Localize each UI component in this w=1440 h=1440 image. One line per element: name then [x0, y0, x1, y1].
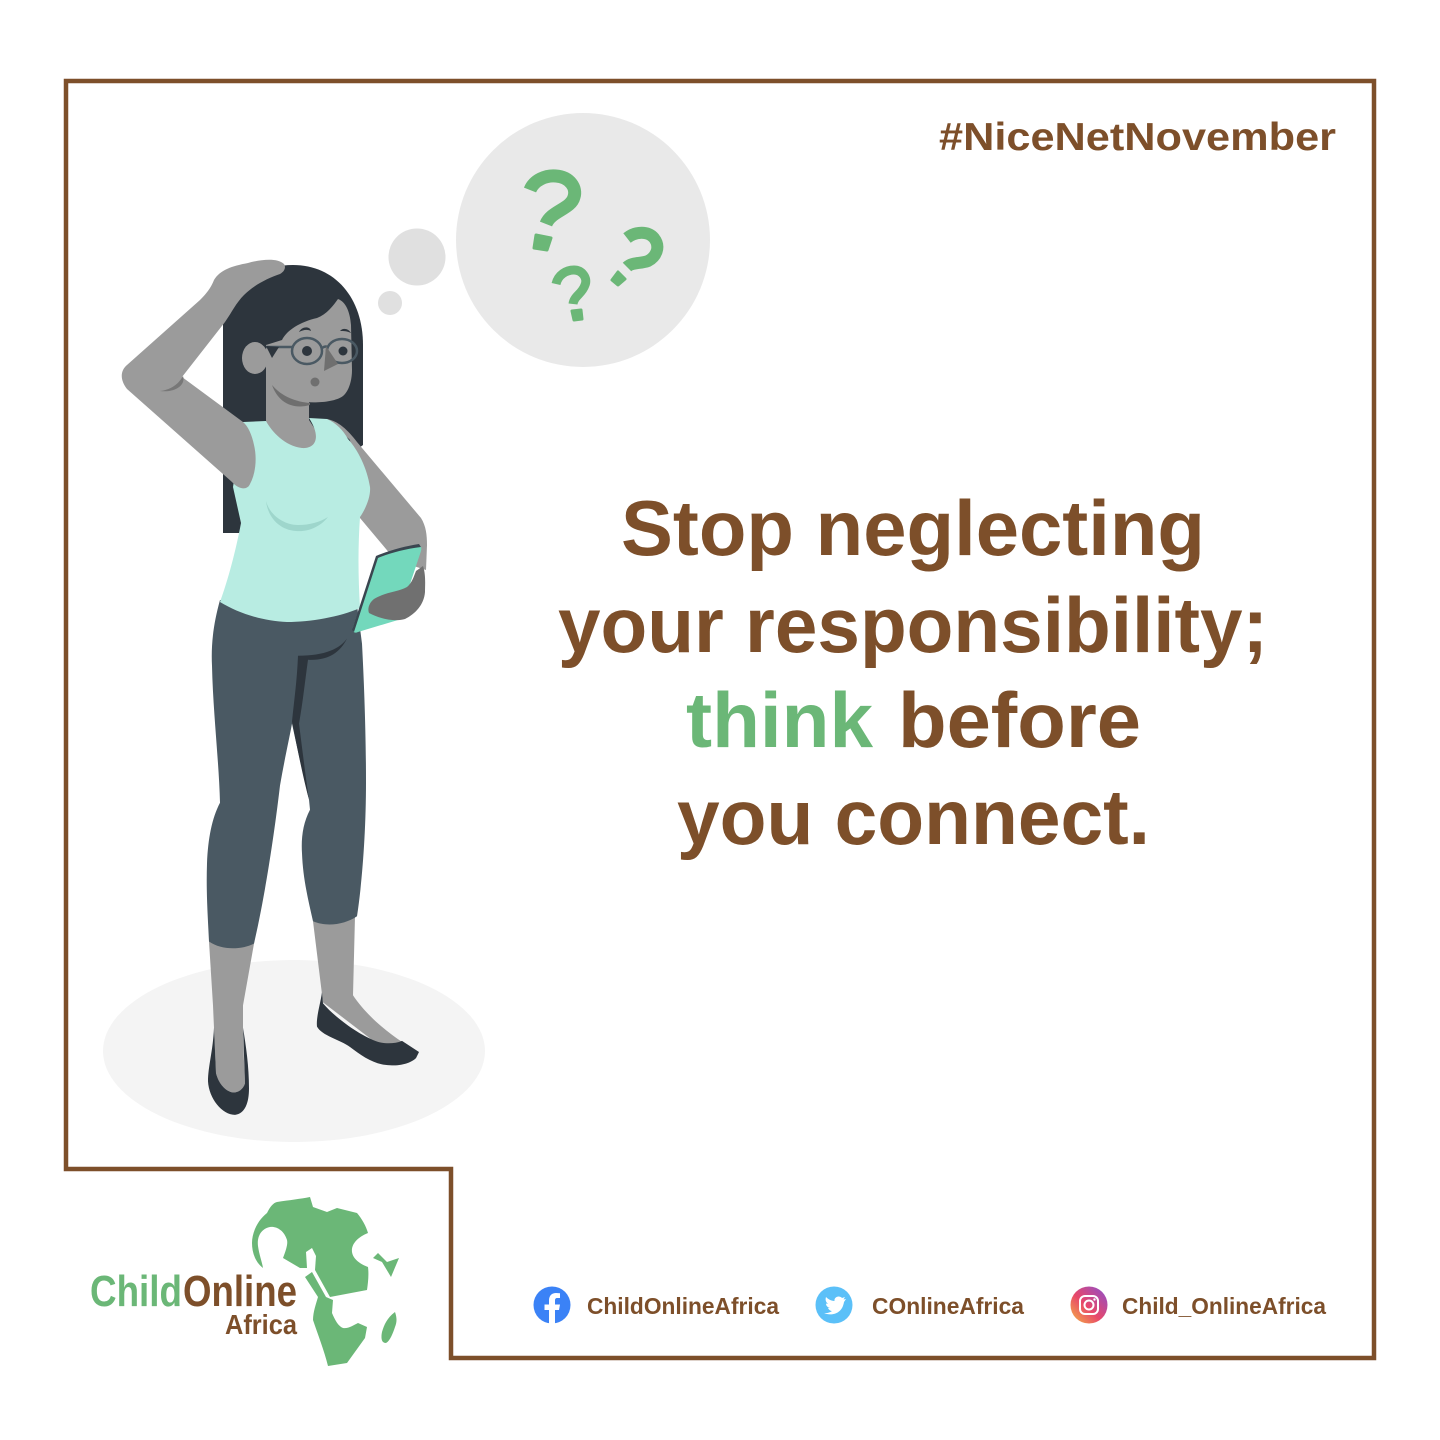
left shoe — [208, 1028, 249, 1115]
lower body — [207, 600, 419, 1115]
logo: wordmark: Child — [90, 1267, 182, 1316]
logo: Online — [183, 1267, 297, 1316]
social: instagram — [1070, 1286, 1326, 1324]
social: facebook — [534, 1286, 779, 1324]
question mark: right — [612, 233, 657, 285]
headline: you connect. — [677, 773, 1150, 861]
left leg skin — [209, 942, 254, 1093]
raised arm — [122, 260, 285, 488]
nose — [324, 346, 338, 371]
ground shadow — [103, 960, 485, 1142]
leggings shadow — [292, 639, 347, 800]
eyes — [266, 327, 351, 358]
headline: Stop neglecting — [621, 484, 1205, 572]
face — [266, 299, 352, 402]
question mark: small — [556, 270, 586, 320]
elbow crease — [160, 376, 183, 391]
phone — [353, 545, 421, 633]
social: twitter: COnlineAfrica — [872, 1293, 1024, 1319]
tank top — [220, 418, 370, 622]
thought bubble — [378, 113, 710, 367]
glasses — [266, 338, 357, 364]
mouth — [310, 378, 320, 386]
headline: your responsibility; — [558, 581, 1268, 669]
highlighted word: think — [686, 676, 874, 764]
headline — [558, 484, 1268, 861]
social: facebook: ChildOnlineAfrica — [587, 1293, 779, 1319]
question mark: large — [530, 176, 575, 250]
illustration: woman with phone — [122, 260, 427, 1115]
neck — [266, 370, 322, 450]
ear — [242, 342, 268, 374]
headline: before — [898, 676, 1141, 764]
chest fold — [266, 501, 328, 531]
right leg skin — [313, 916, 402, 1046]
social: instagram: Child_OnlineAfrica — [1122, 1293, 1326, 1319]
logo: Africa map — [252, 1197, 399, 1366]
logo — [90, 1197, 399, 1366]
arm on hip — [327, 419, 427, 570]
phone edge — [352, 544, 421, 632]
chin shadow — [272, 385, 310, 406]
hair — [223, 265, 363, 533]
right shoe — [317, 992, 419, 1065]
social: twitter — [816, 1286, 1024, 1324]
logo: Africa — [225, 1309, 297, 1340]
hand — [368, 566, 425, 620]
hashtag: #NiceNetNovember — [939, 116, 1336, 159]
leggings — [207, 600, 366, 948]
